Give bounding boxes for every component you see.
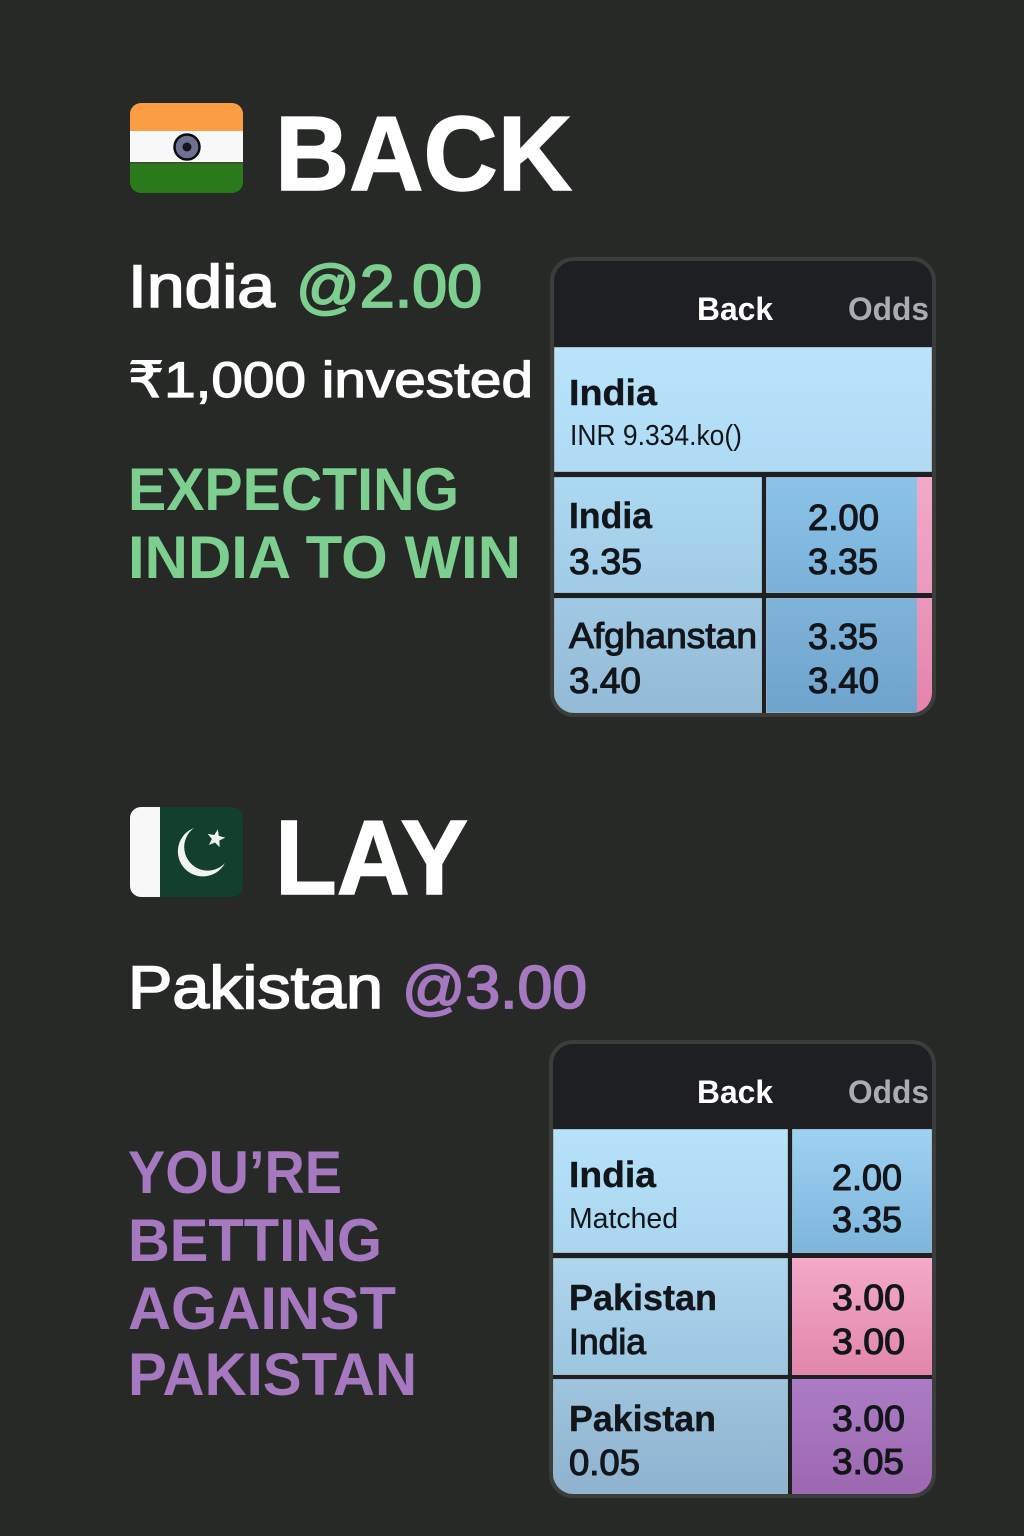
row: India summary: India bbox=[569, 372, 658, 413]
text: betting against Pakistan: BETTING bbox=[128, 1207, 382, 1274]
text: amount invested: ₹1,000 invested bbox=[128, 352, 533, 408]
row: Pakistan India: India bbox=[569, 1321, 647, 1362]
row: India matched bbox=[569, 1154, 902, 1240]
text: Pakistan at 3.00: Pakistan bbox=[128, 954, 383, 1021]
row: India summary: INR 9.334.ko() bbox=[570, 420, 742, 452]
row: Afghanistan odds: 3.40 bbox=[569, 660, 641, 701]
text: betting against Pakistan: PAKISTAN bbox=[128, 1341, 417, 1408]
row: India odds: India bbox=[569, 495, 653, 536]
panel: lay section bbox=[128, 799, 934, 1496]
text: Pakistan at 3.00 bbox=[128, 954, 587, 1021]
icon: India flag bbox=[130, 103, 243, 193]
heading: BACK: BACK bbox=[275, 95, 572, 213]
text: betting against Pakistan: AGAINST bbox=[128, 1275, 396, 1342]
row: Pakistan 0.05: 0.05 bbox=[569, 1442, 640, 1483]
panel: back section bbox=[128, 95, 934, 715]
row: Pakistan 0.05: Pakistan bbox=[569, 1398, 716, 1439]
row: Pakistan 0.05 bbox=[569, 1398, 905, 1483]
icon: Pakistan flag bbox=[130, 807, 243, 897]
row: India matched: 2.00 bbox=[832, 1157, 902, 1198]
text: expecting India to win: EXPECTING bbox=[128, 456, 459, 523]
row: Pakistan India: 3.00 bbox=[832, 1321, 905, 1362]
panel: back odds table bbox=[552, 259, 934, 715]
text: betting against Pakistan bbox=[128, 1139, 417, 1408]
panel: lay odds table bbox=[551, 1042, 934, 1496]
row: Pakistan India bbox=[569, 1277, 905, 1362]
row: Afghanistan odds: 3.40 bbox=[808, 660, 879, 701]
row: India matched: 3.35 bbox=[832, 1199, 902, 1240]
heading: LAY: LAY bbox=[275, 799, 468, 917]
row: India odds bbox=[569, 495, 879, 582]
row: India summary bbox=[569, 372, 742, 452]
text: Pakistan at 3.00: @3.00 bbox=[402, 954, 587, 1021]
table header: Odds: Odds bbox=[848, 291, 929, 327]
text: India at 2.00 bbox=[128, 253, 482, 320]
row: India odds: 2.00 bbox=[808, 497, 879, 538]
row: India matched: Matched bbox=[569, 1203, 678, 1235]
row: Afghanistan odds: Afghanstan bbox=[569, 615, 757, 656]
table header: Back: Back bbox=[697, 1074, 773, 1110]
text: expecting India to win: INDIA TO WIN bbox=[128, 524, 521, 591]
table header: Odds: Odds bbox=[848, 1074, 929, 1110]
table header: Back: Back bbox=[697, 291, 773, 327]
row: Pakistan India: 3.00 bbox=[832, 1277, 905, 1318]
text: India at 2.00: @2.00 bbox=[296, 253, 482, 320]
row: India odds: 3.35 bbox=[808, 541, 878, 582]
row: Afghanistan odds: 3.35 bbox=[808, 616, 878, 657]
text: betting against Pakistan: YOU’RE bbox=[128, 1139, 342, 1206]
row: Pakistan 0.05: 3.00 bbox=[832, 1398, 905, 1439]
row: Pakistan 0.05: 3.05 bbox=[832, 1441, 904, 1482]
row: India odds: 3.35 bbox=[569, 541, 642, 582]
text: India at 2.00: India bbox=[128, 253, 276, 320]
row: Pakistan India: Pakistan bbox=[569, 1277, 717, 1318]
text: expecting India to win bbox=[128, 456, 521, 591]
row: India matched: India bbox=[569, 1154, 657, 1195]
row: Afghanistan odds bbox=[569, 615, 879, 701]
